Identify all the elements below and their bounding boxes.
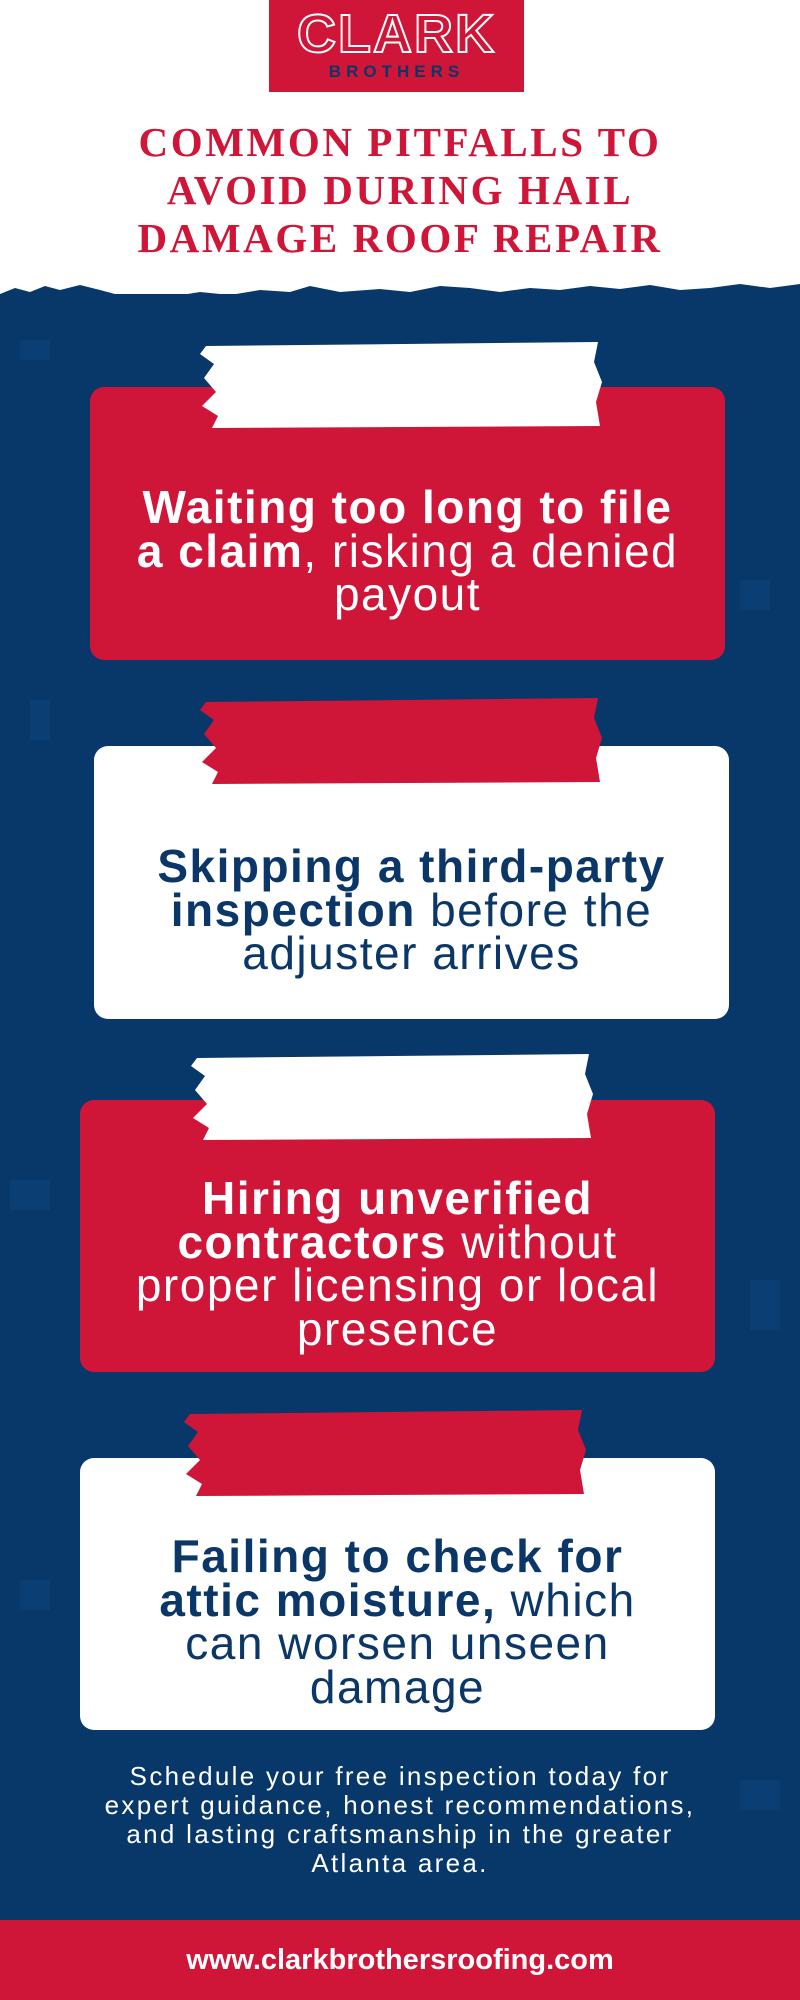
card 3: presence [297, 1302, 498, 1354]
tape 4 [184, 1410, 586, 1496]
footer bar with url [0, 1920, 800, 2000]
tape 1 [200, 342, 602, 428]
card 3 [80, 1100, 715, 1372]
title: AVOID DURING HAIL [167, 167, 633, 213]
card 3: Hiring unverified [202, 1172, 593, 1224]
card 4: damage [310, 1660, 485, 1712]
closing text: and lasting craftsmanship in the greater [126, 1819, 674, 1849]
closing text: Atlanta area. [311, 1848, 489, 1878]
title: DAMAGE ROOF REPAIR [137, 215, 663, 261]
card 3: proper licensing or local [136, 1259, 659, 1311]
closing text [105, 1761, 695, 1878]
card 1: Waiting too long to file [143, 481, 672, 533]
card 1 [90, 387, 725, 660]
card 4: attic moisture, which [159, 1574, 636, 1626]
closing text: Schedule your free inspection today for [130, 1761, 670, 1791]
card 1: a claim, risking a denied [137, 525, 678, 577]
card 4 [80, 1458, 715, 1730]
logo: CLARK [297, 4, 496, 64]
card 4: can worsen unseen [185, 1617, 610, 1669]
title: COMMON PITFALLS TO [139, 119, 661, 165]
card 2: adjuster arrives [242, 927, 581, 979]
logo: BROTHERS [329, 62, 464, 81]
card 3: contractors without [177, 1216, 618, 1268]
card 4: Failing to check for [172, 1530, 623, 1582]
card 2 [94, 746, 729, 1019]
closing text: expert guidance, honest recommendations, [105, 1790, 695, 1820]
logo [269, 0, 524, 92]
tape 2 [200, 698, 602, 784]
title [137, 119, 663, 261]
tape 3 [191, 1054, 593, 1140]
footer bar with url: www.clarkbrothersroofing.com [186, 1944, 614, 1976]
card 2: inspection before the [171, 884, 652, 936]
card 1: payout [334, 568, 481, 620]
card 2: Skipping a third-party [157, 840, 666, 892]
